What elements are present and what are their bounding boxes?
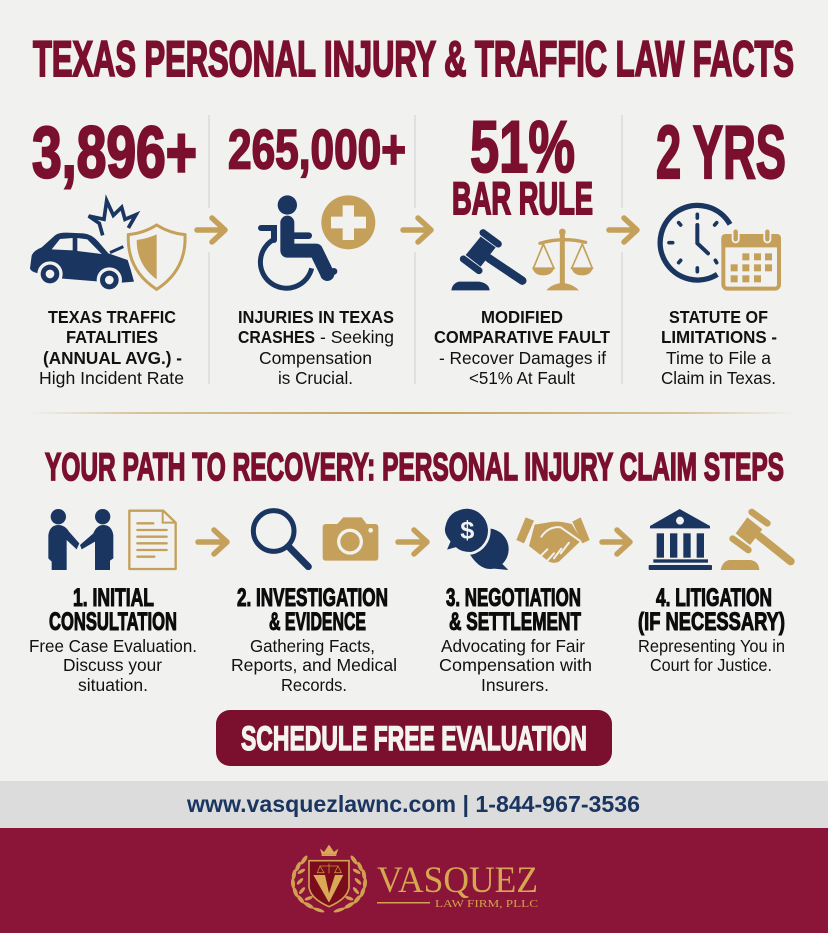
label: injuries: CRASHES (238, 327, 315, 347)
step title: & SETTLEMENT (449, 608, 581, 636)
step title: 4. LITIGATION (656, 584, 772, 612)
label: statute of limitations (661, 307, 777, 388)
panel: step 4 (638, 509, 791, 675)
arrow 2 (403, 218, 431, 242)
icon: money chat and handshake (444, 507, 590, 570)
arrow: step 1 to 2 (198, 530, 227, 554)
panel: traffic fatalities (30, 113, 197, 388)
step description (231, 636, 397, 695)
label: comparative fault (434, 307, 610, 388)
arrow 3 (609, 218, 637, 242)
step description: Advocating for Fair (441, 636, 585, 656)
stat: bar rule: BAR RULE (452, 173, 593, 224)
step description: Discuss your (63, 655, 162, 675)
step title: 2. INVESTIGATION (237, 584, 388, 612)
label: traffic fatalities: FATALITIES (66, 327, 158, 347)
step description: Records. (281, 675, 347, 695)
button: schedule free evaluation: SCHEDULE FREE EVALUATION (241, 720, 587, 758)
icon: clock and calendar (660, 205, 781, 289)
step title (638, 584, 785, 636)
logo: firm subtitle: LAW FIRM, PLLC (435, 898, 538, 910)
label: injuries: - Seeking (320, 327, 394, 347)
step description: Free Case Evaluation. (29, 636, 197, 656)
step title (446, 584, 581, 636)
step description: Gathering Facts, (250, 636, 375, 656)
panel: step 2 (231, 511, 397, 695)
step title: & EVIDENCE (269, 608, 366, 636)
label: statute of limitations: Claim in Texas. (661, 368, 776, 388)
label: statute of limitations: LIMITATIONS - (661, 327, 777, 347)
step title (49, 584, 177, 636)
label: injuries: INJURIES IN TEXAS (238, 307, 394, 327)
label: comparative fault: <51% At Fault (469, 368, 575, 388)
label: injuries (238, 307, 394, 388)
contact band: www.vasquezlawnc.com | 1-844-967-3536 (186, 791, 640, 817)
label: comparative fault: - Recover Damages if (439, 348, 606, 368)
icon: magnifier and camera (253, 511, 378, 567)
button: schedule free evaluation (216, 710, 612, 766)
stat: 265,000+: 265,000+ (228, 118, 406, 180)
logo: crest (291, 845, 367, 913)
label: traffic fatalities: High Incident Rate (39, 368, 184, 388)
label: statute of limitations: STATUTE OF (669, 307, 768, 327)
step title: CONSULTATION (49, 608, 177, 636)
step title: 3. NEGOTIATION (446, 584, 581, 612)
stat: 51%: 51% (470, 107, 575, 188)
panel: statute of limitations (656, 110, 786, 388)
label: traffic fatalities: (ANNUAL AVG.) - (43, 348, 182, 368)
icon: wheelchair and medical cross (260, 195, 375, 288)
icon: handshake people and document (48, 509, 176, 570)
arrow 1 (197, 218, 225, 242)
step description: Reports, and Medical (231, 655, 397, 675)
arrow: step 3 to 4 (602, 530, 630, 554)
label: statute of limitations: Time to File a (666, 348, 771, 368)
icon: gavel and scales (451, 229, 593, 290)
step description (439, 636, 592, 695)
step description: Compensation with (439, 655, 592, 675)
icon: courthouse and gold gavel (649, 509, 791, 570)
label: traffic fatalities (39, 307, 184, 388)
step description: Court for Justice. (650, 655, 772, 675)
step description (638, 636, 785, 675)
panel: injuries (228, 118, 406, 388)
logo: firm name: VASQUEZ (377, 860, 538, 901)
step description (29, 636, 197, 695)
footer band (0, 828, 828, 933)
label: traffic fatalities: TEXAS TRAFFIC (48, 307, 176, 327)
label: injuries: Compensation (259, 348, 372, 368)
arrow: step 2 to 3 (398, 530, 427, 554)
panel: step 1 (29, 509, 197, 695)
icon: money chat and handshake: $ (460, 517, 474, 545)
step description: Representing You in (638, 636, 785, 656)
step title (237, 584, 388, 636)
label: comparative fault: MODIFIED (481, 307, 563, 327)
step title: 1. INITIAL (73, 584, 154, 612)
label: injuries: is Crucial. (278, 368, 353, 388)
label: comparative fault: COMPARATIVE FAULT (434, 327, 610, 347)
step description: Insurers. (481, 675, 549, 695)
contact band (0, 781, 828, 828)
panel: step 3 (439, 507, 592, 695)
stat: 3,896+: 3,896+ (32, 113, 197, 193)
panel: 51% bar rule (434, 107, 610, 388)
icon: crashed car and shield (30, 201, 185, 293)
step description: situation. (78, 675, 148, 695)
